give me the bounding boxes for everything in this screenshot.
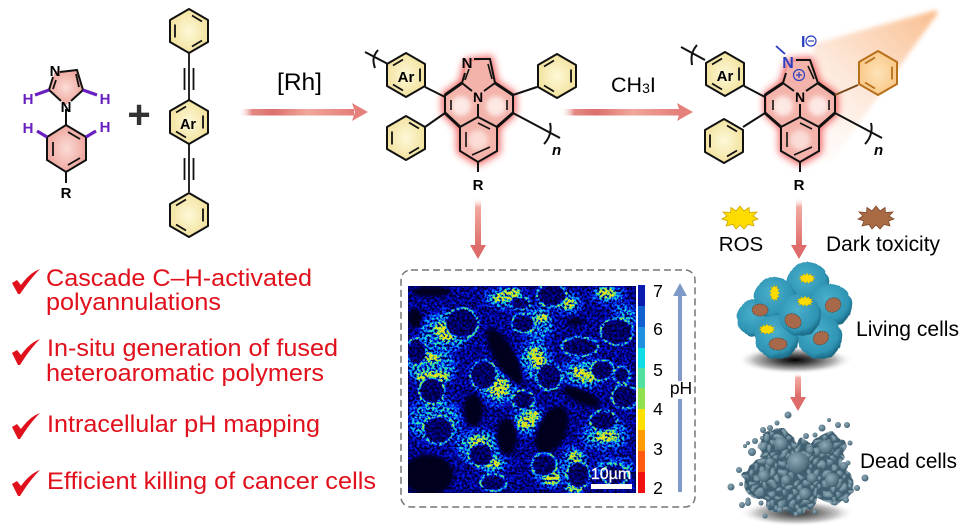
methylated polymer: I — [801, 34, 805, 51]
micrograph — [403, 283, 638, 495]
item: in-situ — [12, 335, 338, 387]
icon: dark toxicity star — [858, 206, 894, 229]
monomer: N-aryl imidazole: N — [50, 63, 60, 80]
arrow: methylation — [560, 103, 693, 121]
arrow: living to dead — [790, 373, 806, 411]
dashed frame — [401, 270, 695, 507]
label: CH3I: CH — [611, 73, 642, 97]
label: Dark toxicity: Dark toxicity — [826, 233, 940, 256]
colour bar labels: 4 — [653, 399, 663, 419]
methylated polymer: N — [795, 89, 805, 105]
item: in-situ: heteroaromatic polymers — [46, 360, 324, 387]
polymer: R — [473, 177, 484, 194]
methylated polymer — [681, 34, 897, 194]
methylated polymer: N — [782, 55, 794, 72]
monomer: N-aryl imidazole: H — [23, 91, 33, 108]
list: features — [12, 265, 376, 496]
plus sign: + — [127, 93, 151, 137]
label: [Rh]: [Rh] — [277, 69, 322, 96]
scale bar: 10µm — [591, 466, 631, 483]
monomer: N-aryl imidazole: N — [61, 99, 71, 116]
monomer: diyne — [170, 9, 208, 237]
methylated polymer: Ar — [717, 68, 733, 85]
arrow: polymer to pH image — [470, 197, 486, 259]
item: killing: Efficient killing of cancer cells — [47, 468, 376, 495]
colour bar labels: 7 — [653, 281, 663, 301]
monomer: N-aryl imidazole — [23, 63, 110, 202]
item: cascade — [12, 265, 312, 316]
polymer — [365, 50, 576, 194]
icon: ROS star — [722, 206, 758, 229]
methylated polymer: n — [874, 142, 883, 159]
panel: pH imaging — [401, 270, 695, 507]
label: ROS: ROS — [719, 233, 763, 256]
arrow: Rh catalysis — [238, 103, 368, 121]
colour bar labels: 3 — [653, 439, 663, 459]
arrow: polymer to cells — [791, 197, 807, 259]
illustration: living cells — [737, 262, 853, 374]
colour bar — [638, 285, 645, 493]
pH axis arrow: pH — [670, 378, 692, 398]
light beam — [813, 10, 938, 166]
item: in-situ: In-situ generation of fused — [47, 335, 338, 362]
polymer: Ar — [398, 69, 414, 86]
polymer: n — [552, 142, 561, 159]
methylated polymer: R — [794, 177, 805, 194]
illustration: dead cells — [728, 412, 868, 526]
label: CH3I: 3 — [642, 80, 650, 96]
polymer: N — [473, 89, 483, 105]
polymer: N — [462, 55, 472, 72]
colour bar labels: 5 — [653, 360, 663, 380]
label: CH3I: I — [650, 73, 656, 97]
monomer: N-aryl imidazole: H — [100, 91, 110, 108]
monomer: N-aryl imidazole: H — [100, 119, 110, 136]
pH axis arrow — [670, 283, 692, 492]
label: living cells: Living cells — [856, 318, 959, 341]
colour bar labels: 2 — [653, 478, 663, 498]
monomer: N-aryl imidazole: R — [61, 185, 72, 202]
item: cascade: Cascade C–H-activated — [46, 265, 312, 292]
colour bar labels — [653, 281, 663, 498]
item: pH mapping: Intracellular pH mapping — [47, 411, 320, 438]
label: dead cells: Dead cells — [860, 450, 957, 473]
orange-tinted phenyl ring — [859, 51, 897, 95]
monomer: diyne: Ar — [180, 117, 196, 133]
item: cascade: polyannulations — [46, 289, 221, 316]
colour bar labels: 6 — [653, 319, 663, 339]
monomer: N-aryl imidazole: H — [23, 120, 33, 137]
